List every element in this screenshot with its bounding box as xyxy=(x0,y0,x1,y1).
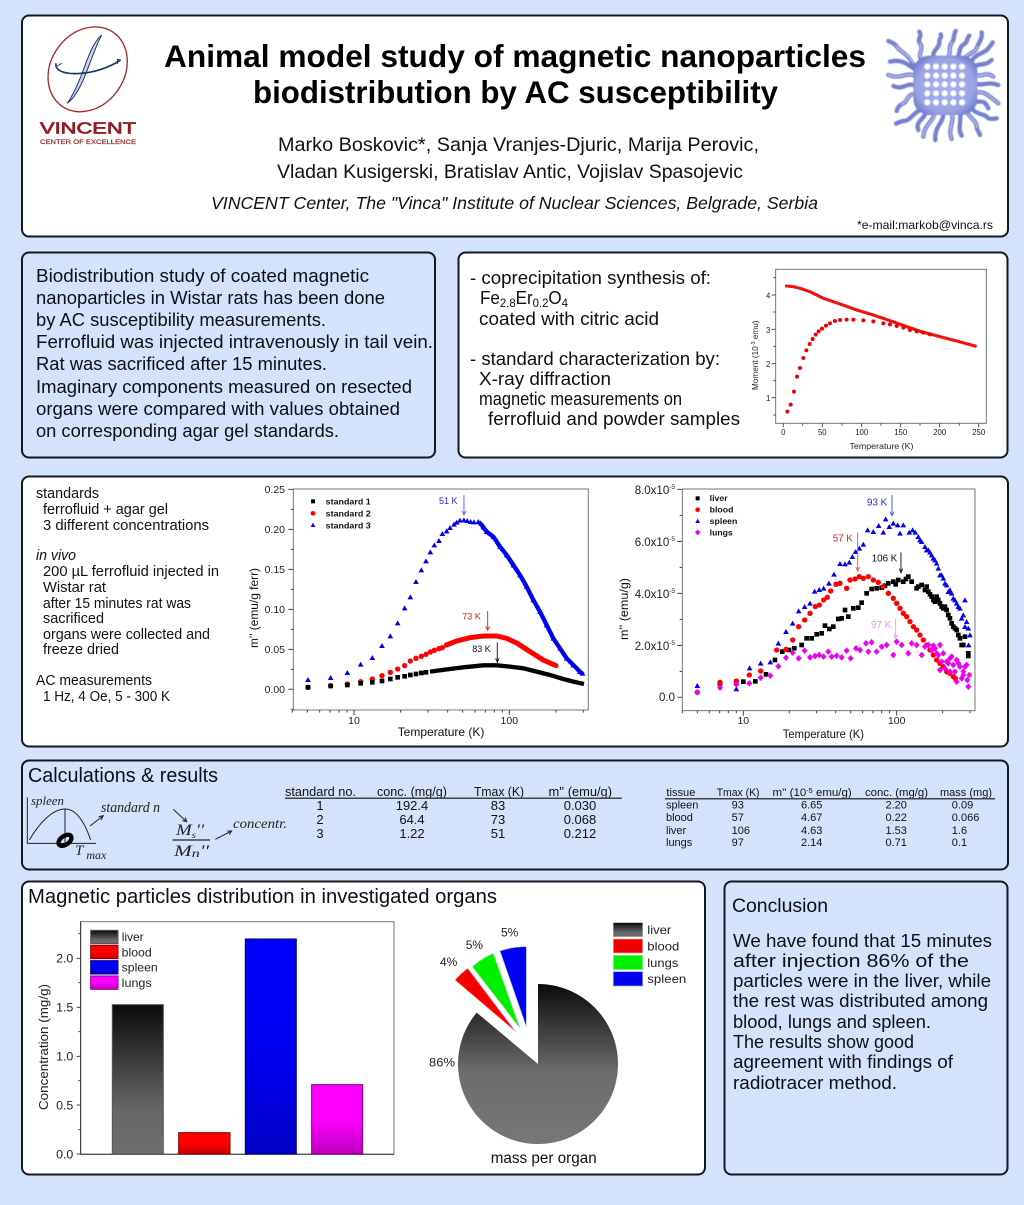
panel: synthesis and characterization xyxy=(458,252,1008,458)
chart: mass per organ pie: 4% xyxy=(440,955,458,969)
chart: moment vs temperature: 250 xyxy=(972,428,986,437)
table: standards: 2 xyxy=(316,812,324,827)
chart: organs m'' vs temperature: 100 xyxy=(888,715,906,727)
authors: Marko Boskovic*, Sanja Vranjes-Djuric, Marija Perovic, xyxy=(278,134,759,156)
synthesis text: - coprecipitation synthesis of: xyxy=(470,268,711,288)
icon: VINCENT logo: VINCENT xyxy=(40,120,136,138)
title: biodistribution by AC susceptibility xyxy=(253,74,778,110)
title: Animal model study of magnetic nanoparticles xyxy=(164,38,866,74)
sketch: Tmax calculation: standard n xyxy=(101,800,160,816)
chart: moment vs temperature: Temperature (K) xyxy=(850,441,914,451)
table: tissues: lungs xyxy=(666,837,693,849)
methods text: organs were collected and xyxy=(43,627,210,643)
chart: concentration bars: 2.0 xyxy=(56,952,73,966)
chart: organs m'' vs temperature: 4.0x10 xyxy=(635,589,669,601)
chart: organs m'' vs temperature: -5 xyxy=(669,484,675,491)
table: standards: Tmax (K) xyxy=(474,784,524,799)
chart: moment vs temperature: Moment (10 xyxy=(751,346,760,390)
conclusion text: agreement with findings of xyxy=(733,1051,954,1072)
table: tissues: 0.1 xyxy=(952,837,967,849)
chart: organs m'' vs temperature: blood xyxy=(710,505,733,515)
chart: organs m'' vs temperature: -5 xyxy=(669,640,675,647)
chart: standards m'' vs temperature: standard 1 xyxy=(326,496,371,506)
chart: organs m'' vs temperature: 57 K xyxy=(833,534,853,544)
chart: mass per organ pie: 5% xyxy=(466,938,483,952)
sketch: Tmax calculation: '' xyxy=(200,843,210,860)
chart: moment vs temperature: 3 xyxy=(766,326,770,335)
synthesis text: - standard characterization by: xyxy=(470,349,720,369)
table: tissues: blood xyxy=(666,812,693,824)
methods text: Wistar rat xyxy=(43,580,106,596)
chart: organs m'' vs temperature: 93 K xyxy=(867,498,888,508)
sketch: Tmax calculation: M xyxy=(176,822,189,839)
abstract text xyxy=(36,266,433,441)
chart: standards m'' vs temperature: 51 K xyxy=(439,496,458,506)
chart: standards m'' vs temperature: m'' (emu/g ferr) xyxy=(247,568,261,648)
heading: distribution: Magnetic particles distribution in investigated organs xyxy=(28,886,497,908)
chart: concentration bars: liver xyxy=(122,930,144,944)
table: standards: 0.212 xyxy=(564,826,596,841)
chart: moment vs temperature: 150 xyxy=(894,428,908,437)
sketch: Tmax calculation: M xyxy=(174,843,187,860)
conclusion text xyxy=(733,930,992,1093)
chart: standards m'' vs temperature: 0.00 xyxy=(265,684,285,696)
table: tissues: -5 xyxy=(806,788,813,795)
icon: coated nanoparticle xyxy=(888,31,998,140)
table: tissues: emu/g) xyxy=(813,787,852,799)
methods text: 1 Hz, 4 Oe, 5 - 300 K xyxy=(43,689,170,705)
table: tissues: 0.09 xyxy=(952,800,973,812)
chart: concentration bars: spleen xyxy=(122,961,158,975)
panel: header xyxy=(22,11,1008,237)
chart: concentration bars: 0.0 xyxy=(56,1148,73,1162)
table: tissues: tissue xyxy=(666,787,695,799)
e-mail: *e-mail:markob@vinca.rs xyxy=(857,218,993,232)
chart: concentration bars: lungs xyxy=(122,976,152,990)
chart: moment vs temperature: 2 xyxy=(766,360,770,369)
methods text: freeze dried xyxy=(43,642,119,658)
chart: organs m'' vs temperature: Temperature (K) xyxy=(783,727,864,741)
abstract text: by AC susceptibility measurements. xyxy=(36,310,326,330)
chart: concentration bars xyxy=(37,922,394,1162)
chart: organs m'' vs temperature: liver xyxy=(710,493,728,503)
table: standards: 0.030 xyxy=(564,798,596,813)
table: tissues: 93 xyxy=(732,800,744,812)
table: tissues: 6.65 xyxy=(801,800,822,812)
synthesis text: 4 xyxy=(562,296,568,310)
table: tissues: 2.20 xyxy=(886,800,907,812)
chart: moment vs temperature xyxy=(751,269,986,451)
chart: organs m'' vs temperature: -5 xyxy=(669,588,675,595)
chart: standards m'' vs temperature: 73 K xyxy=(462,612,481,622)
table: standards: 3 xyxy=(316,826,324,841)
heading: conclusion: Conclusion xyxy=(732,896,828,917)
chart: standards m'' vs temperature: standard 2 xyxy=(326,508,371,518)
table: standards: 0.068 xyxy=(564,812,596,827)
chart: organs m'' vs temperature: 6.0x10 xyxy=(635,537,669,549)
panel: AC susceptibility measurements xyxy=(22,476,1008,746)
icon: VINCENT logo: CENTER OF EXCELLENCE xyxy=(40,139,136,146)
table: tissues: 4.67 xyxy=(801,812,822,824)
chart: moment vs temperature: 0 xyxy=(781,428,786,437)
table: tissues: 1.53 xyxy=(886,825,907,837)
icon: VINCENT logo xyxy=(32,11,144,146)
abstract text: Ferrofluid was injected intravenously in tail vein. xyxy=(36,332,433,352)
synthesis text xyxy=(470,268,740,429)
methods text: ferrofluid + agar gel xyxy=(43,502,168,518)
table: tissues: spleen xyxy=(666,800,698,812)
abstract text: Imaginary components measured on resected xyxy=(36,377,412,397)
chart: concentration bars: Concentration (mg/g) xyxy=(37,984,51,1110)
synthesis text: coated with citric acid xyxy=(479,309,659,329)
table: tissues: liver xyxy=(666,825,687,837)
table: standards: 83 xyxy=(491,798,505,813)
panel: abstract xyxy=(22,252,435,458)
table: standards: 1 xyxy=(316,798,324,813)
table: tissues xyxy=(665,787,995,849)
chart: mass per organ pie: spleen xyxy=(647,972,686,986)
chart: mass per organ pie: lungs xyxy=(647,956,678,970)
chart: concentration bars: 0.5 xyxy=(56,1098,73,1112)
chart: concentration bars: 1.5 xyxy=(56,1000,73,1014)
methods text: 200 µL ferrofluid injected in xyxy=(43,564,219,580)
sketch: Tmax calculation: n xyxy=(192,846,200,860)
synthesis text: X-ray diffraction xyxy=(479,369,611,389)
methods text xyxy=(36,486,219,705)
chart: standards m'' vs temperature: 100 xyxy=(501,715,518,727)
table: standards: m'' (emu/g) xyxy=(548,784,612,799)
abstract text: Rat was sacrificed after 15 minutes. xyxy=(36,354,327,374)
methods text: AC measurements xyxy=(36,673,152,689)
methods text: 3 different concentrations xyxy=(43,518,209,534)
table: standards: 51 xyxy=(491,826,505,841)
conclusion text: radiotracer method. xyxy=(733,1072,897,1093)
chart: standards m'' vs temperature xyxy=(247,484,588,739)
chart: concentration bars: 1.0 xyxy=(56,1050,73,1064)
conclusion text: blood, lungs and spleen. xyxy=(733,1011,931,1032)
chart: organs m'' vs temperature: lungs xyxy=(710,527,733,537)
chart: moment vs temperature: 200 xyxy=(933,428,947,437)
abstract text: nanoparticles in Wistar rats has been done xyxy=(36,288,385,308)
table: standards: standard no. xyxy=(285,784,356,799)
conclusion text: after injection 86% of the xyxy=(733,950,969,971)
abstract text: Biodistribution study of coated magnetic xyxy=(36,266,369,286)
conclusion text: the rest was distributed among xyxy=(733,990,988,1011)
chart: standards m'' vs temperature: 0.05 xyxy=(265,644,285,656)
chart: moment vs temperature: 4 xyxy=(766,292,771,300)
synthesis text: Er xyxy=(516,288,533,308)
chart: organs m'' vs temperature: 10 xyxy=(737,715,749,727)
chart: standards m'' vs temperature: 10 xyxy=(348,715,360,727)
chart: organs m'' vs temperature: -5 xyxy=(669,536,675,543)
chart: moment vs temperature: 1 xyxy=(766,394,770,403)
table: standards: 192.4 xyxy=(396,798,428,813)
table: tissues: 0.71 xyxy=(886,837,907,849)
chart: moment vs temperature: emu) xyxy=(751,320,760,341)
chart: standards m'' vs temperature: 0.20 xyxy=(265,524,285,536)
table: tissues: m'' (10 xyxy=(772,787,805,799)
heading: calculations and results: Calculations & results xyxy=(28,765,218,787)
methods text: sacrificed xyxy=(43,611,104,627)
synthesis text: Fe xyxy=(480,288,501,308)
chart: organs m'' vs temperature: 106 K xyxy=(872,554,898,564)
sketch: Tmax calculation: '' xyxy=(196,822,205,839)
chart: mass per organ pie: blood xyxy=(647,940,679,954)
sketch: Tmax calculation: s xyxy=(192,830,196,840)
sketch: Tmax calculation: spleen xyxy=(31,793,64,808)
synthesis text: ferrofluid and powder samples xyxy=(488,409,740,429)
sketch: Tmax calculation xyxy=(27,793,287,862)
chart: organs m'' vs temperature: spleen xyxy=(710,516,737,526)
authors xyxy=(277,134,759,183)
chart: mass per organ pie: mass per organ xyxy=(491,1150,597,1167)
chart: standards m'' vs temperature: Temperature (K) xyxy=(398,725,484,739)
table: tissues: 106 xyxy=(732,825,750,837)
table: tissues: Tmax (K) xyxy=(717,787,760,799)
chart: standards m'' vs temperature: 0.15 xyxy=(265,564,285,576)
chart: organs m'' vs temperature xyxy=(617,484,975,741)
table: standards: 73 xyxy=(491,812,505,827)
chart: standards m'' vs temperature: standard 3 xyxy=(326,520,371,530)
table: tissues: 57 xyxy=(732,812,744,824)
chart: concentration bars: blood xyxy=(122,945,152,959)
conclusion text: We have found that 15 minutes xyxy=(733,930,992,951)
chart: moment vs temperature: 100 xyxy=(855,428,869,437)
chart: organs m'' vs temperature: 0.0 xyxy=(659,692,675,704)
sketch: Tmax calculation: concentr. xyxy=(233,816,287,831)
chart: organs m'' vs temperature: 97 K xyxy=(871,620,892,631)
chart: mass per organ pie: liver xyxy=(647,923,671,937)
chart: organs m'' vs temperature: m'' (emu/g) xyxy=(617,578,631,640)
sketch: Tmax calculation: max xyxy=(86,848,107,862)
chart: mass per organ pie: 5% xyxy=(501,926,519,940)
chart: organs m'' vs temperature: 8.0x10 xyxy=(635,485,669,497)
conclusion text: The results show good xyxy=(733,1031,914,1052)
table: tissues: 0.22 xyxy=(886,812,907,824)
sketch: Tmax calculation: T xyxy=(75,843,83,859)
conclusion text: particles were in the liver, while xyxy=(733,970,991,991)
table: standards xyxy=(285,784,622,841)
table: tissues: 97 xyxy=(732,837,744,849)
methods text: after 15 minutes rat was xyxy=(43,596,191,612)
table: standards: conc. (mg/g) xyxy=(377,784,447,799)
panel: conclusion xyxy=(724,882,1008,1174)
table: tissues: 1.6 xyxy=(952,825,967,837)
chart: mass per organ pie xyxy=(429,923,686,1167)
chart: moment vs temperature: 50 xyxy=(818,428,827,437)
affiliation: VINCENT Center, The "Vinca" Institute of Nuclear Sciences, Belgrade, Serbia xyxy=(211,193,818,213)
abstract text: on corresponding agar gel standards. xyxy=(36,421,339,441)
title xyxy=(164,38,866,110)
methods text: in vivo xyxy=(36,548,76,564)
table: standards: 1.22 xyxy=(399,826,425,841)
authors: Vladan Kusigerski, Bratislav Antic, Vojislav Spasojevic xyxy=(277,161,743,183)
chart: standards m'' vs temperature: 0.25 xyxy=(265,484,285,496)
synthesis text: 2.8 xyxy=(500,296,516,310)
panel: calculations and results xyxy=(22,760,1008,870)
table: tissues: 4.63 xyxy=(801,825,822,837)
chart: moment vs temperature: -3 xyxy=(751,341,757,346)
table: tissues: 2.14 xyxy=(801,837,822,849)
methods text: standards xyxy=(36,486,99,502)
synthesis text: O xyxy=(548,288,562,308)
chart: standards m'' vs temperature: 0.10 xyxy=(265,604,285,616)
panel: magnetic particles distribution xyxy=(22,882,705,1174)
table: tissues: mass (mg) xyxy=(940,787,992,799)
synthesis text: 0.2 xyxy=(533,296,549,310)
chart: standards m'' vs temperature: 83 K xyxy=(472,644,491,654)
table: standards: 64.4 xyxy=(399,812,425,827)
table: tissues: 0.066 xyxy=(952,812,979,824)
chart: organs m'' vs temperature: 2.0x10 xyxy=(635,641,669,653)
table: tissues: conc. (mg/g) xyxy=(865,787,928,799)
chart: mass per organ pie: 86% xyxy=(429,1056,455,1070)
synthesis text: magnetic measurements on xyxy=(479,389,682,409)
abstract text: organs were compared with values obtained xyxy=(36,399,400,419)
